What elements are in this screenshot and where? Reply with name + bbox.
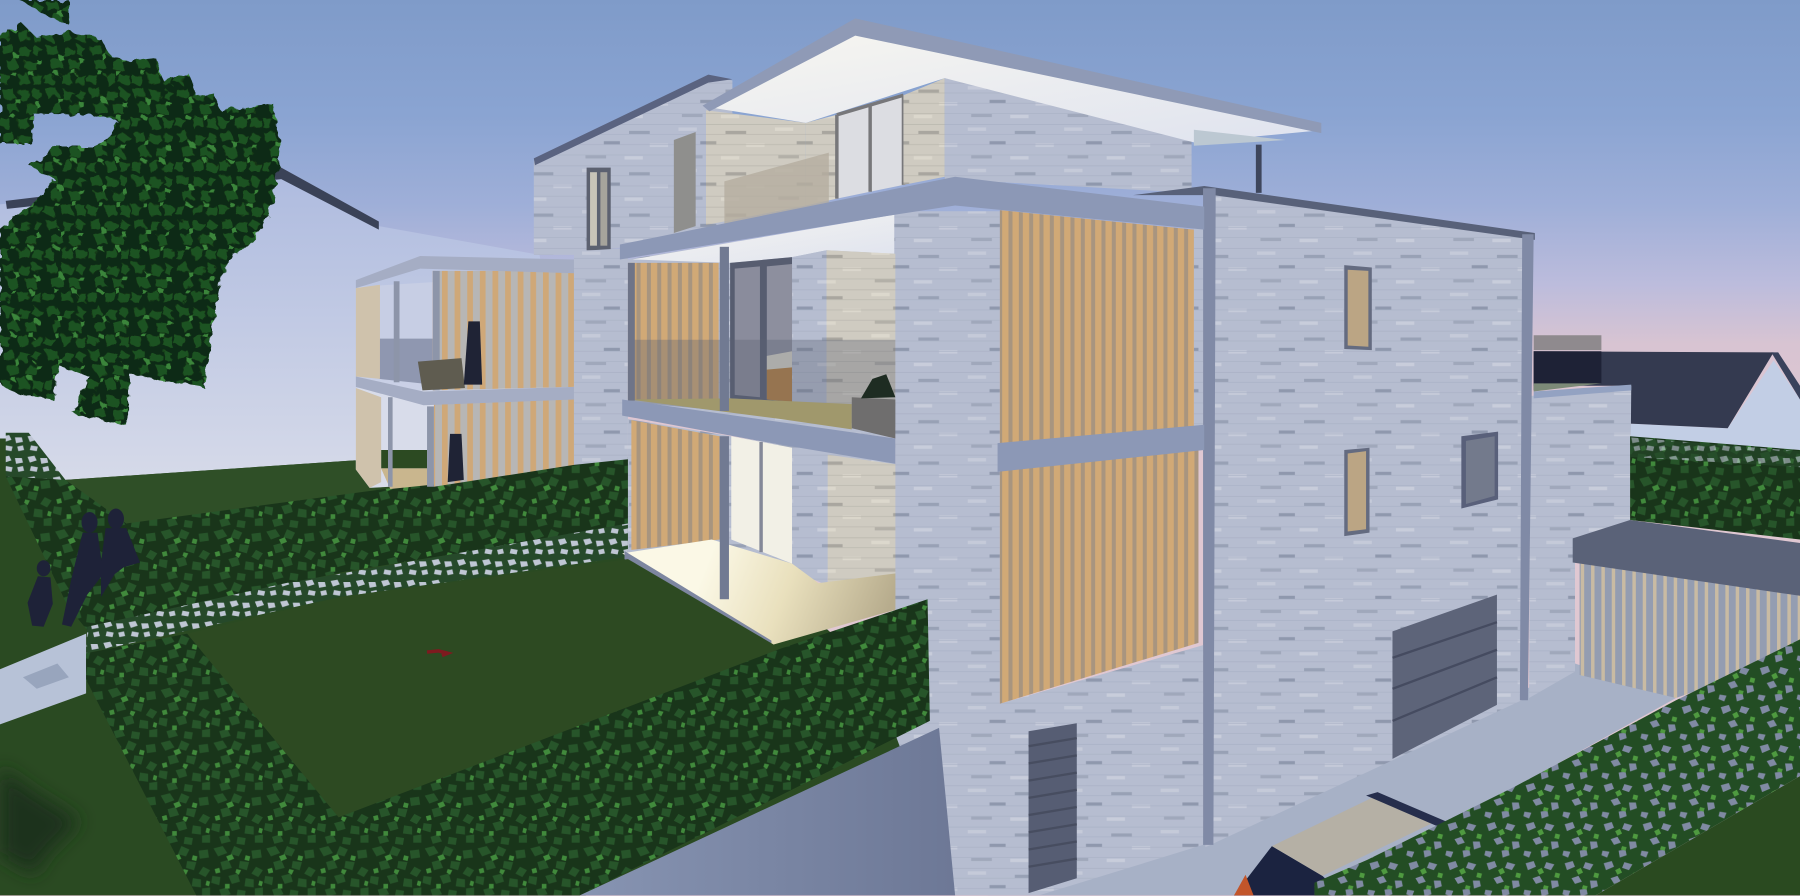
garage door <box>1392 595 1497 759</box>
red flowers on lawn <box>427 651 574 828</box>
neighbouring house on the right <box>1534 335 1800 450</box>
service door <box>1029 723 1077 893</box>
exterior stair at left <box>0 634 86 724</box>
main floor roof band <box>620 177 1204 259</box>
concrete band between screens <box>998 425 1204 472</box>
brick tower front <box>895 211 1203 895</box>
left wing with wooden screens <box>356 256 575 489</box>
far left hedge <box>6 433 126 630</box>
tree <box>0 0 280 427</box>
brick connecting wall <box>574 248 628 465</box>
ground and left lawn <box>0 439 941 895</box>
middle balcony <box>622 215 895 466</box>
foreground plant <box>0 767 80 875</box>
flat overhanging roof <box>703 18 1321 193</box>
wooden screen lower <box>1000 450 1198 704</box>
pale flowering hedge strip <box>86 523 628 653</box>
right foreground grass <box>1596 776 1800 895</box>
downpipes <box>1203 188 1534 845</box>
back hedge row <box>87 457 628 627</box>
ground floor terrace <box>622 419 900 649</box>
main lawn <box>187 559 781 817</box>
silhouettes of people on the lawn <box>28 509 140 627</box>
wooden screen upper <box>1000 210 1194 443</box>
right foreground hedge <box>1314 639 1800 895</box>
front garden hedge <box>86 599 930 895</box>
upper storey rear brick block <box>534 75 732 255</box>
top storey recess and warm brick <box>706 78 1192 225</box>
car in driveway <box>1234 792 1458 895</box>
right facade of main block <box>1133 186 1535 847</box>
strip of brick beside the screen <box>1194 218 1203 427</box>
concrete retaining wall <box>580 728 955 895</box>
driveway <box>987 664 1676 895</box>
background haze and neighbouring house on the left <box>0 168 574 482</box>
right annex and garage <box>1529 383 1800 698</box>
